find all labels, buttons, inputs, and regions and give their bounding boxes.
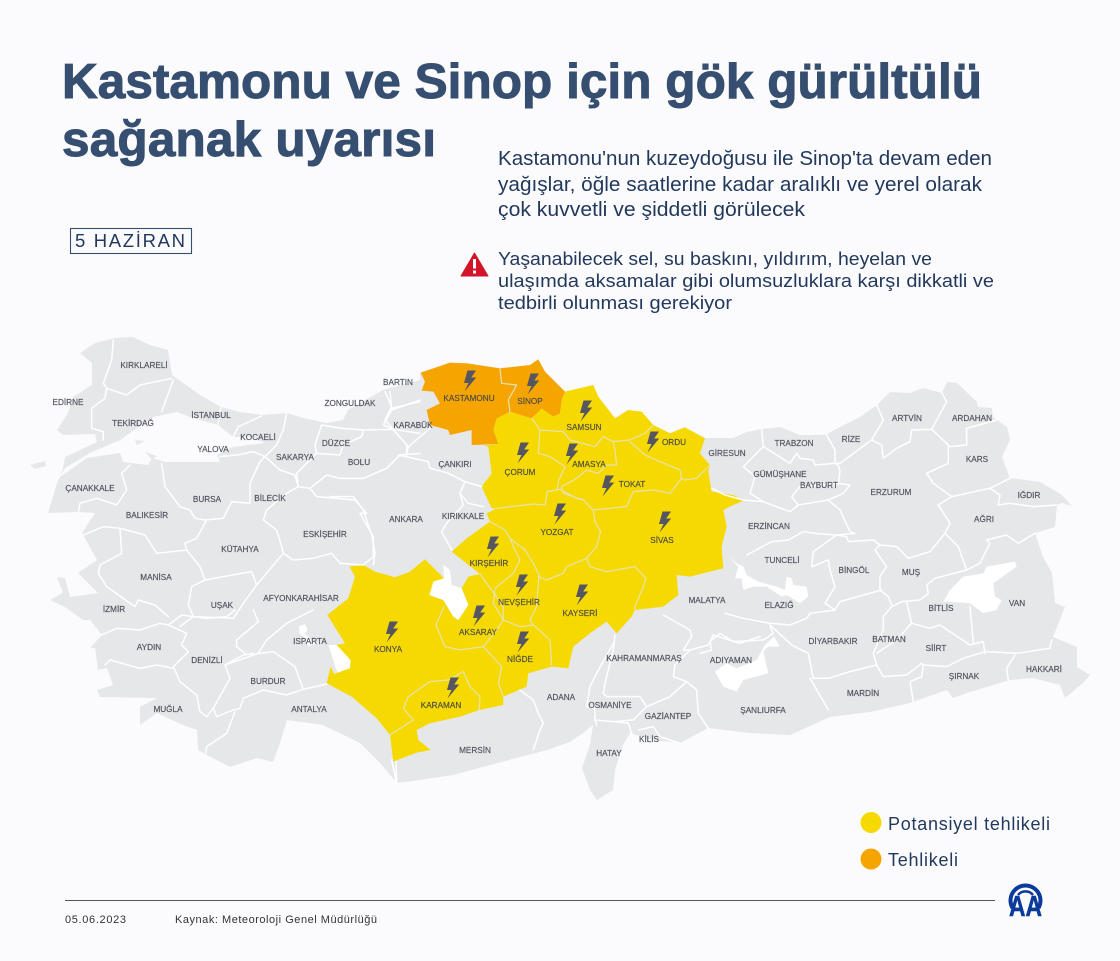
province labels highlighted: ÇORUM: [505, 468, 536, 477]
province labels gray: GÜMÜŞHANE: [753, 469, 807, 479]
province labels gray: AĞRI: [974, 514, 994, 524]
province labels highlighted: KIRŞEHİR: [470, 558, 508, 568]
land base: [48, 337, 1090, 800]
province labels gray: AYDIN: [137, 643, 161, 652]
province labels gray: BAYBURT: [800, 481, 838, 490]
title: sağanak uyarısı: [62, 112, 436, 167]
warning text: tedbirli olunması gerekiyor: [498, 292, 732, 313]
islands: [30, 440, 157, 469]
province labels gray: KÜTAHYA: [221, 544, 259, 554]
province labels gray: TRABZON: [774, 439, 814, 448]
province labels gray: BARTIN: [383, 378, 413, 387]
intro text: [498, 148, 992, 221]
province labels gray: KOCAELİ: [240, 432, 276, 442]
province labels gray: OSMANİYE: [588, 700, 632, 710]
province labels gray: BALIKESİR: [126, 510, 168, 520]
province labels gray: ŞIRNAK: [949, 672, 980, 681]
province labels highlighted: SİVAS: [650, 535, 674, 545]
province labels gray: ARDAHAN: [952, 414, 992, 423]
province labels gray: ANTALYA: [291, 705, 327, 714]
province labels highlighted: KASTAMONU: [443, 394, 495, 403]
province labels gray: BİLECİK: [254, 493, 286, 503]
province labels gray: AFYONKARAHİSAR: [263, 593, 339, 603]
province labels gray: ERZİNCAN: [748, 521, 790, 531]
provinces: Kastamonu and Sinop (danger): [421, 359, 565, 445]
province labels gray: ESKİŞEHİR: [303, 529, 347, 539]
icon: AA logo: [1009, 886, 1042, 923]
province borders southwest: [102, 610, 397, 782]
province labels highlighted: AKSARAY: [459, 628, 498, 637]
legend: Potansiyel tehlikeli: [888, 814, 1050, 834]
footer source: Kaynak: Meteoroloji Genel Müdürlüğü: [175, 914, 377, 926]
province labels gray: ÇANKIRI: [438, 460, 472, 469]
province labels gray: BİTLİS: [928, 603, 954, 613]
province labels gray: SAKARYA: [276, 453, 314, 462]
province labels gray: UŞAK: [211, 601, 234, 610]
province labels gray: ÇANAKKALE: [65, 484, 115, 493]
map of Turkey: [30, 337, 1090, 800]
province labels gray: BATMAN: [872, 635, 906, 644]
province labels gray: EDİRNE: [53, 397, 84, 407]
intro text: Kastamonu'nun kuzeydoğusu ile Sinop'ta devam eden: [498, 148, 992, 170]
province labels gray: GAZİANTEP: [645, 711, 692, 721]
province borders centre: [330, 392, 760, 783]
province labels gray: MANİSA: [140, 572, 172, 582]
province labels gray: MERSİN: [459, 745, 491, 755]
province labels gray: RİZE: [842, 434, 861, 444]
province labels gray: BURSA: [193, 495, 222, 504]
province labels gray: DENİZLİ: [191, 655, 223, 665]
province labels gray: İZMİR: [103, 604, 125, 614]
province labels gray: ADANA: [547, 693, 576, 702]
footer rule: [65, 900, 995, 901]
title: Kastamonu ve Sinop için gök gürültülü: [62, 54, 982, 109]
province labels highlighted: SİNOP: [517, 396, 543, 406]
province labels highlighted: NEVŞEHİR: [498, 597, 540, 607]
province labels gray: KARABÜK: [393, 420, 433, 430]
province labels gray: MUŞ: [902, 568, 921, 577]
province labels highlighted: [374, 394, 686, 710]
province labels highlighted: YOZGAT: [540, 528, 574, 537]
province labels gray: HATAY: [596, 749, 622, 758]
province labels highlighted: KAYSERİ: [563, 608, 597, 618]
province labels gray: ELAZIĞ: [764, 600, 794, 610]
province labels gray: İSTANBUL: [191, 410, 231, 420]
province labels gray: TEKİRDAĞ: [112, 418, 154, 428]
province labels gray: VAN: [1009, 599, 1025, 608]
province labels gray: BOLU: [348, 458, 370, 467]
province labels gray: ŞANLIURFA: [740, 706, 786, 715]
province labels gray: BİNGÖL: [839, 565, 870, 575]
province labels gray: ANKARA: [389, 515, 423, 524]
province labels gray: ARTVİN: [892, 413, 922, 423]
legend: [860, 812, 1050, 870]
province labels gray: HAKKARİ: [1026, 664, 1062, 674]
province labels gray: IĞDIR: [1018, 490, 1040, 500]
province labels gray: MALATYA: [688, 596, 726, 605]
sea of Marmara: [60, 412, 265, 477]
province labels gray: TUNCELİ: [764, 555, 800, 565]
legend: Tehlikeli: [888, 850, 958, 870]
province labels gray: [53, 360, 1062, 758]
intro text: yağışlar, öğle saatlerine kadar aralıklı ve yerel olarak: [498, 174, 983, 196]
province labels gray: KAHRAMANMARAŞ: [606, 654, 682, 663]
province labels highlighted: NİĞDE: [507, 654, 534, 664]
province labels gray: YALOVA: [197, 445, 229, 454]
province labels gray: KIRIKKALE: [442, 512, 485, 521]
provinces: Konya and neighbours (potential danger): [327, 359, 744, 762]
province labels gray: ZONGULDAK: [325, 399, 376, 408]
province labels highlighted: KARAMAN: [421, 701, 461, 710]
province labels gray: MUĞLA: [153, 704, 183, 714]
province labels highlighted: AMASYA: [572, 460, 606, 469]
icon: warning triangle: [461, 253, 488, 276]
province labels gray: GİRESUN: [708, 448, 746, 458]
province labels highlighted: KONYA: [374, 645, 403, 654]
date box: 5 HAZİRAN: [75, 230, 185, 251]
province labels gray: KIRKLARELİ: [120, 360, 168, 370]
province labels gray: ADIYAMAN: [710, 656, 752, 665]
icons: lightning bolts: [386, 370, 671, 698]
province borders east: [700, 393, 1057, 710]
warning text: [498, 248, 994, 313]
icon: AA logo: AA: [1009, 891, 1042, 923]
warning text: ulaşımda aksamalar gibi olumsuzluklara karşı dikkatli ve: [498, 270, 994, 291]
province labels gray: KİLİS: [639, 734, 660, 744]
province labels gray: ERZURUM: [871, 488, 912, 497]
province labels gray: BURDUR: [250, 677, 286, 686]
province labels gray: MARDİN: [847, 688, 879, 698]
province labels gray: ISPARTA: [293, 637, 327, 646]
title: [62, 54, 982, 167]
lakes: [299, 557, 1017, 692]
province labels gray: DÜZCE: [322, 438, 351, 448]
footer date: 05.06.2023: [65, 914, 126, 926]
province labels highlighted: TOKAT: [619, 480, 645, 489]
province labels gray: SİİRT: [926, 643, 946, 653]
province labels highlighted: SAMSUN: [566, 423, 602, 432]
warning text: Yaşanabilecek sel, su baskını, yıldırım, heyelan ve: [498, 248, 932, 269]
province labels gray: DİYARBAKIR: [809, 636, 858, 646]
province borders west: [78, 340, 420, 627]
intro text: çok kuvvetli ve şiddetli görülecek: [498, 199, 806, 221]
province labels gray: KARS: [966, 455, 989, 464]
province labels highlighted: ORDU: [662, 438, 686, 447]
